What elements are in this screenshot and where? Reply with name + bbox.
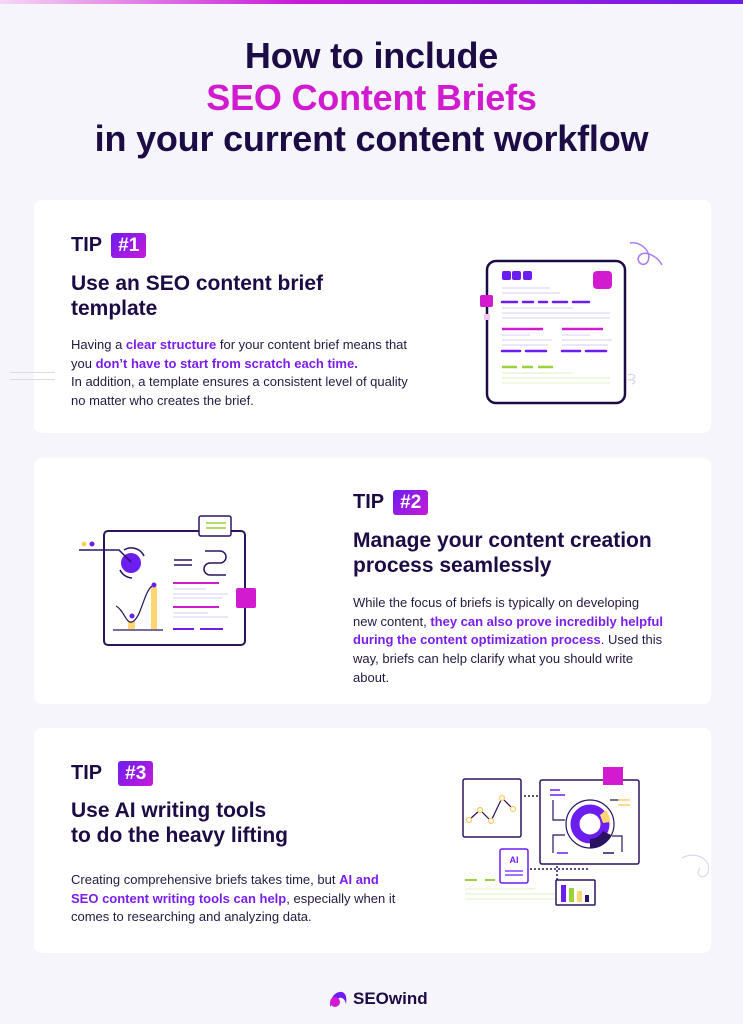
panel: tip 2 — [34, 458, 711, 704]
tip 1 text: no matter who creates the brief. — [71, 393, 254, 408]
tip 2 heading: process seamlessly — [353, 554, 551, 577]
illustration: AI analytics: AI — [510, 855, 518, 865]
tip 2 heading: Manage your content creation — [353, 529, 652, 552]
title — [95, 35, 648, 159]
tip 1 text: In addition, a template ensures a consistent level of quality — [71, 374, 408, 389]
tip 1 label: #1 — [118, 235, 139, 256]
title: SEO Content Briefs — [206, 76, 537, 118]
tip 1 text — [71, 337, 408, 408]
tip 2 text: While the focus of briefs is typically on developing new content, they can also prove incredibly helpful during the content optimization process. Used this way, briefs can help clarify what you should write about. — [353, 595, 663, 685]
tip 3 heading: to do the heavy lifting — [71, 824, 288, 847]
panel: tip 1 — [34, 200, 711, 433]
tip 1 text: Having a clear structure for your content brief means that — [71, 337, 407, 352]
tip 3 text: SEO content writing tools can help, especially when it — [71, 891, 395, 906]
tip 2 label: #2 — [400, 492, 421, 513]
tip 3 text: comes to researching and analyzing data. — [71, 909, 312, 924]
tip 2 label — [353, 490, 428, 515]
tip 3 label — [71, 761, 153, 786]
title: in your current content workflow — [95, 118, 648, 159]
tip 3 text — [71, 872, 396, 924]
tip 1 text: you don’t have to start from scratch each time. — [71, 356, 358, 371]
panel: tip 3 — [34, 728, 711, 953]
logo: SEOwind: SEOwind — [353, 989, 428, 1008]
tip 1 heading: Use an SEO content brief — [71, 272, 323, 295]
illustration: AI analytics — [462, 767, 640, 906]
title: How to include — [245, 35, 498, 76]
tip 3 text: Creating comprehensive briefs takes time, but AI and — [71, 872, 379, 887]
illustration: process dashboard — [79, 515, 256, 646]
tip 2 label: TIP — [353, 491, 384, 513]
tip 2 heading — [353, 529, 652, 577]
decorative swirl right — [682, 854, 710, 878]
tip 3 heading: Use AI writing tools — [71, 799, 266, 822]
tip 3 label: #3 — [125, 763, 146, 784]
illustration: template document — [480, 242, 663, 404]
tip 1 label — [71, 233, 146, 258]
tip 1 heading — [71, 272, 324, 320]
tip 3 label: TIP — [71, 762, 102, 784]
tip 1 heading: template — [71, 297, 157, 320]
tip 3 heading — [71, 799, 288, 847]
decorative lines left — [10, 372, 55, 373]
tip 1 label: TIP — [71, 234, 102, 256]
